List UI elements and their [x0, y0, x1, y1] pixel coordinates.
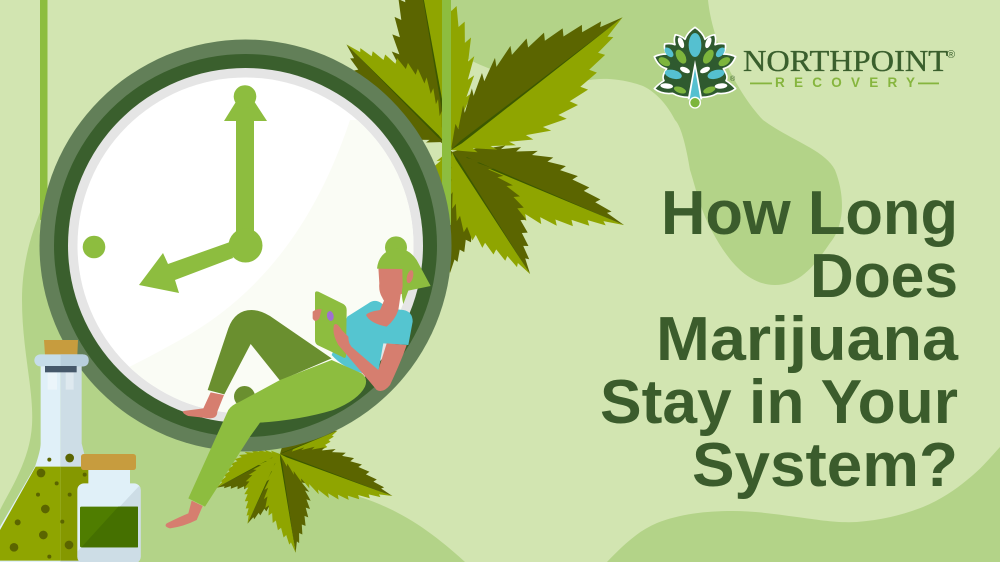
title: System? — [692, 431, 958, 500]
title: Marijuana — [656, 305, 959, 374]
neck band — [45, 366, 77, 372]
head — [378, 267, 406, 300]
jar label shade — [81, 507, 138, 547]
logo wordmark: NORTHPOINT — [743, 43, 948, 78]
flask lip shade — [61, 354, 89, 366]
left hand — [313, 309, 322, 321]
hanging stem left — [40, 0, 48, 220]
clock — [40, 40, 452, 452]
shirt — [332, 301, 413, 373]
jar label — [80, 507, 138, 547]
flask glass — [0, 363, 61, 562]
neck highlights — [48, 372, 74, 390]
cork — [44, 340, 78, 355]
flask lip — [34, 354, 89, 366]
emblem feathers — [657, 33, 732, 95]
jar body — [77, 483, 141, 562]
back leg — [208, 310, 332, 394]
jar shade — [77, 483, 142, 562]
liquid shaded half — [61, 467, 91, 561]
registered mark: ® — [947, 49, 955, 61]
title: Stay in Your — [600, 368, 958, 437]
cannabis plant: top — [323, 0, 651, 292]
logo tagline: RECOVERY — [775, 75, 915, 90]
emblem spike — [688, 60, 702, 99]
hair bun — [385, 236, 407, 258]
hour marker dot — [83, 236, 105, 258]
ear — [405, 269, 415, 284]
jar neck — [88, 469, 130, 486]
flask — [0, 340, 142, 562]
flask glass shaded half — [61, 363, 88, 562]
title: Does — [810, 242, 958, 311]
woman reading tablet — [166, 236, 431, 528]
hour hand — [139, 242, 233, 293]
emblem base dot fill — [690, 98, 700, 107]
liquid — [0, 467, 61, 561]
logo — [654, 27, 955, 109]
background blob: bottom right — [607, 447, 1000, 562]
logo emblem — [654, 27, 736, 109]
emblem base dot — [689, 97, 701, 109]
cannabis plant: bottom — [208, 414, 401, 556]
arm — [333, 324, 407, 391]
title: How Long — [661, 179, 958, 248]
bottom hour marker dot — [234, 386, 255, 407]
jar lid — [81, 454, 136, 470]
minute hand — [224, 85, 267, 243]
tablet — [315, 291, 347, 358]
front foot — [166, 501, 203, 528]
clock centre — [228, 228, 262, 262]
tagline rule right — [918, 82, 939, 84]
emblem silhouette — [654, 27, 736, 97]
emblem registered mark: ® — [730, 75, 736, 83]
background blob: bottom left — [0, 205, 465, 562]
title — [600, 179, 959, 500]
back foot — [183, 392, 224, 418]
bubbles — [10, 454, 87, 559]
neck — [366, 290, 401, 327]
tagline rule left — [750, 82, 772, 84]
hanging stem right — [442, 0, 451, 225]
background blob: top right — [450, 0, 842, 285]
emblem spike inner — [690, 68, 700, 99]
front leg — [188, 360, 366, 507]
thumb mark — [326, 310, 334, 322]
hair — [377, 249, 431, 304]
